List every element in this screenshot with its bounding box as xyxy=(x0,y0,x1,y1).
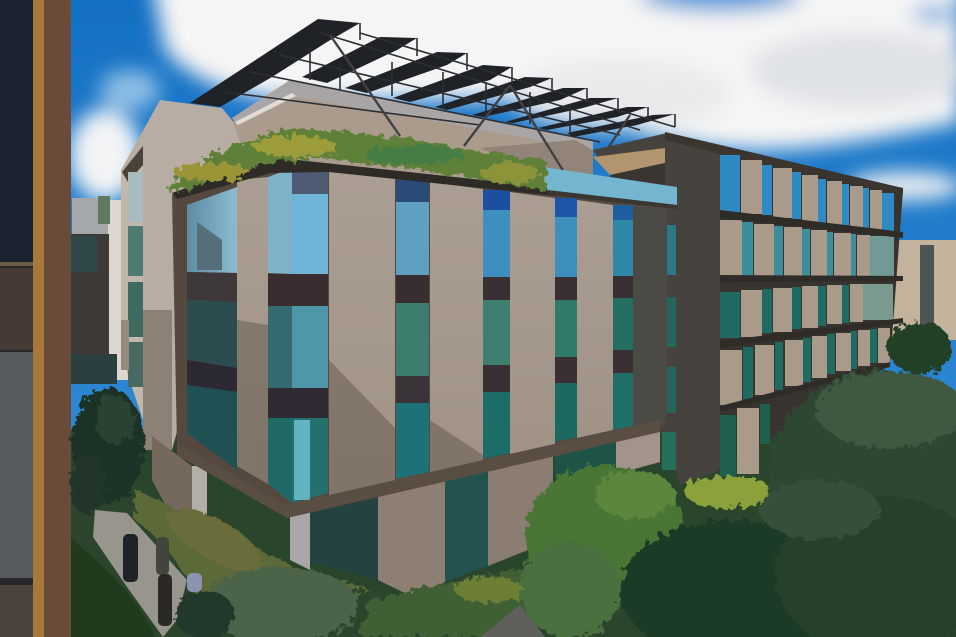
middle floor xyxy=(720,220,894,277)
ground floor xyxy=(290,428,676,598)
left tree xyxy=(70,387,144,515)
ground base planting xyxy=(71,430,956,637)
facade panels xyxy=(237,170,613,497)
beige stair tower xyxy=(121,100,240,520)
right wing xyxy=(665,132,903,477)
rooftop planting xyxy=(168,129,547,193)
soffit band xyxy=(177,420,660,518)
ground-level floor xyxy=(720,328,890,477)
floor slabs xyxy=(720,210,903,412)
roof parapet xyxy=(172,157,547,199)
pavement path xyxy=(480,605,545,637)
lower floor xyxy=(720,284,893,338)
pedestrians xyxy=(123,534,202,626)
solar pergola xyxy=(190,19,675,185)
distant wall xyxy=(100,200,130,380)
footpath xyxy=(93,510,187,637)
hedge bottom left xyxy=(71,538,155,637)
west glazing xyxy=(187,187,237,470)
garden beds xyxy=(135,490,540,637)
upper floor xyxy=(720,155,894,233)
roof terrace pavilion xyxy=(232,80,593,190)
foreground tower left xyxy=(0,0,71,637)
glazing columns xyxy=(268,168,676,503)
distant building left xyxy=(71,196,117,384)
right trees xyxy=(620,322,956,637)
courtyard planting xyxy=(684,476,772,508)
centre tree xyxy=(520,465,685,637)
cast shadows xyxy=(237,320,483,497)
dark service core xyxy=(593,133,720,485)
clouds xyxy=(69,0,956,201)
main facade xyxy=(172,157,677,518)
distant building right xyxy=(885,240,956,340)
glass balustrade xyxy=(543,167,677,205)
